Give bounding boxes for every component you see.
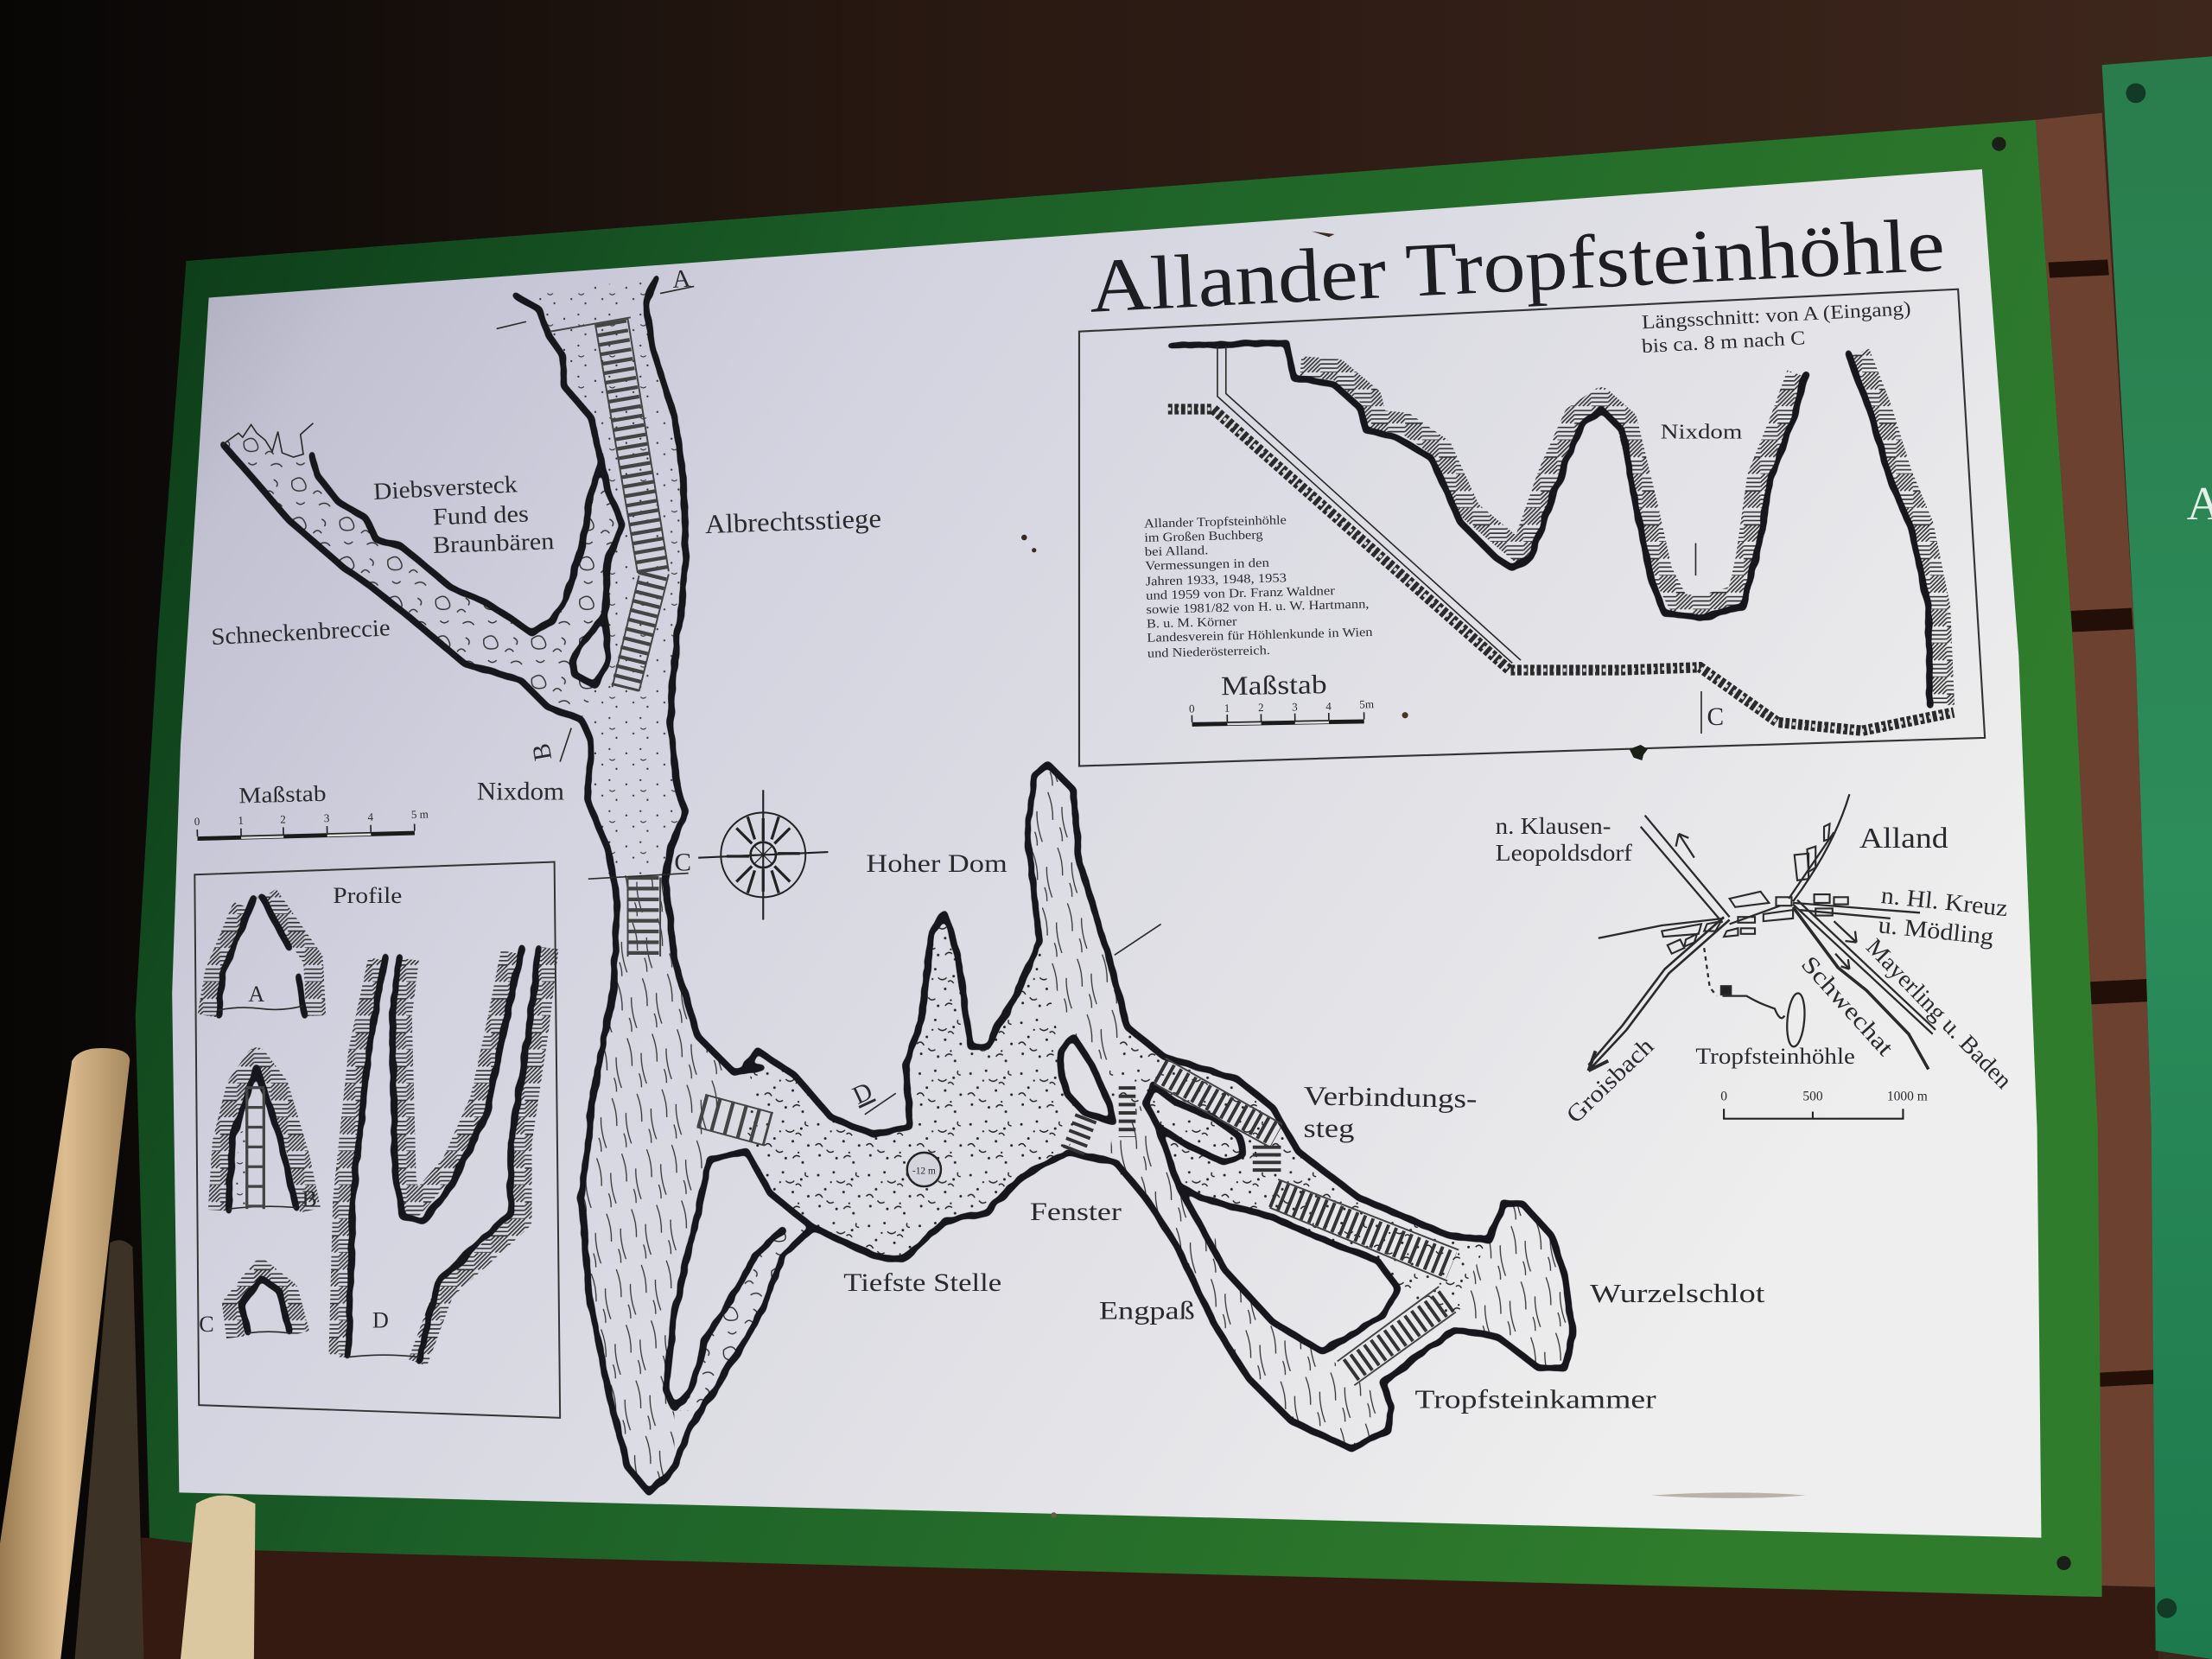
cave labels: Fund des: [432, 500, 529, 531]
map labels: n. Hl. Kreuz: [1880, 882, 2009, 922]
cave labels: Diebsversteck: [372, 471, 518, 505]
cave labels: Tiefste Stelle: [843, 1269, 1001, 1297]
panel: green sign frame: [136, 120, 2102, 1597]
section scale bar: [1188, 668, 1374, 727]
cave labels: Braunbären: [432, 528, 555, 559]
map labels: u. Mödling: [1877, 912, 1995, 950]
cave labels: Engpaß: [1099, 1298, 1195, 1325]
map scale bar: 1000 m: [1887, 1089, 1928, 1103]
section survey credits: B. u. M. Körner: [1147, 615, 1237, 631]
map labels: Groisbach: [1561, 1033, 1659, 1128]
panel: longitudinal section: bis ca. 8 m nach C: [1641, 327, 1806, 357]
section scale bar: 0: [1189, 702, 1195, 715]
profile B: [219, 1058, 317, 1211]
scale bar: plan: Maßstab: [238, 781, 327, 808]
title: Allander Tropfsteinhöhle: [1087, 202, 1947, 329]
section survey credits: und 1959 von Dr. Franz Waldner: [1146, 584, 1335, 603]
frame screws and board specks: [1021, 137, 2071, 1570]
section survey credits: Vermessungen in den: [1145, 556, 1270, 574]
panel: profiles: Profile: [333, 883, 402, 908]
section scale bar: Maßstab: [1221, 669, 1327, 701]
map labels: Schwechat: [1796, 951, 1898, 1061]
panel: white map board: [172, 169, 2041, 1538]
cave labels: Tropfsteinkammer: [1415, 1383, 1657, 1414]
panel: profiles: [194, 862, 560, 1418]
scale bar: plan: 2: [280, 812, 286, 826]
cave labels: Wurzelschlot: [1590, 1278, 1765, 1308]
cave plan: main map: [223, 278, 1573, 1492]
section walls: [1171, 343, 1929, 705]
cave labels: [211, 265, 1765, 1414]
section survey credits: Landesverein für Höhlenkunde in Wien: [1147, 626, 1374, 645]
scale bar: plan: 0: [194, 815, 200, 828]
section survey credits: sowie 1981/82 von H. u. W. Hartmann,: [1146, 597, 1370, 617]
map scale bar: 500: [1802, 1089, 1823, 1103]
profile A: [207, 894, 316, 1016]
depth marker: -12 m: [912, 1166, 936, 1176]
panel: longitudinal section: Nixdom: [1661, 421, 1742, 444]
section scale bar: 3: [1292, 700, 1298, 713]
profile C: [199, 1268, 301, 1338]
section survey credits: [1144, 512, 1374, 661]
cave labels: Nixdom: [477, 779, 564, 806]
profile B: B: [302, 1186, 317, 1211]
section survey credits: im Großen Buchberg: [1144, 528, 1263, 545]
ladders and section marks: [497, 286, 1459, 1385]
scale bar: plan: 1: [238, 814, 244, 827]
profile D: [339, 948, 549, 1363]
cave labels: B: [527, 741, 557, 763]
section scale bar: 1: [1224, 702, 1230, 715]
section scale bar: 2: [1258, 701, 1264, 714]
map labels: Mayerling u. Baden: [1860, 933, 2017, 1095]
cave labels: C: [674, 849, 691, 876]
section scale bar: 5m: [1359, 697, 1374, 710]
map labels: Leopoldsdorf: [1496, 840, 1633, 867]
scale bar: plan: 4: [367, 810, 374, 823]
location map: [1496, 794, 2017, 1128]
panel: longitudinal section: Längsschnitt: von A (Eingang): [1641, 297, 1911, 333]
section survey credits: bei Alland.: [1145, 543, 1208, 559]
cave labels: steg: [1304, 1113, 1354, 1143]
section survey credits: Jahren 1933, 1948, 1953: [1146, 571, 1287, 589]
scale bar: plan: 5 m: [411, 807, 429, 821]
textured floor areas: [223, 278, 1573, 1492]
profile D: D: [372, 1307, 389, 1332]
scale bar: plan: [194, 779, 429, 841]
panel: longitudinal section: C: [1707, 703, 1724, 731]
map labels: Alland: [1859, 822, 1948, 855]
compass rose: [698, 790, 828, 919]
section survey credits: und Niederösterreich.: [1147, 644, 1270, 661]
profile C: C: [199, 1312, 214, 1337]
shaft and stairs: [1217, 346, 1521, 663]
scale bar: plan: 3: [324, 811, 330, 824]
section scale bar: 4: [1325, 700, 1332, 713]
fringe at end of Diebsversteck: [223, 423, 313, 457]
map labels: Tropfsteinhöhle: [1695, 1044, 1855, 1069]
cave labels: D: [849, 1077, 877, 1110]
cave labels: Fenster: [1030, 1198, 1122, 1226]
cave walls: [223, 278, 1573, 1492]
cave labels: Verbindungs-: [1303, 1080, 1478, 1114]
profile A: A: [248, 982, 264, 1007]
cave labels: A: [671, 265, 691, 294]
panel: longitudinal section: [1079, 289, 1985, 766]
cave labels: Hoher Dom: [866, 850, 1007, 878]
panel: neighbouring green sign: [2102, 56, 2212, 1659]
map scale bar: [1720, 1089, 1928, 1119]
depth marker: [907, 1153, 941, 1186]
rubble floor: [1168, 409, 1954, 731]
cave labels: Schneckenbreccie: [211, 614, 391, 651]
roads: [1588, 794, 1936, 1071]
section hatching: [1300, 353, 1944, 705]
village buildings: [1662, 823, 1848, 995]
map scale bar: 0: [1720, 1089, 1727, 1103]
cave labels: Albrechtsstiege: [704, 503, 882, 539]
map labels: n. Klausen-: [1496, 813, 1611, 840]
wooden sticks: [0, 1048, 256, 1659]
section survey credits: Allander Tropfsteinhöhle: [1144, 513, 1287, 531]
map labels: [1496, 813, 2017, 1128]
